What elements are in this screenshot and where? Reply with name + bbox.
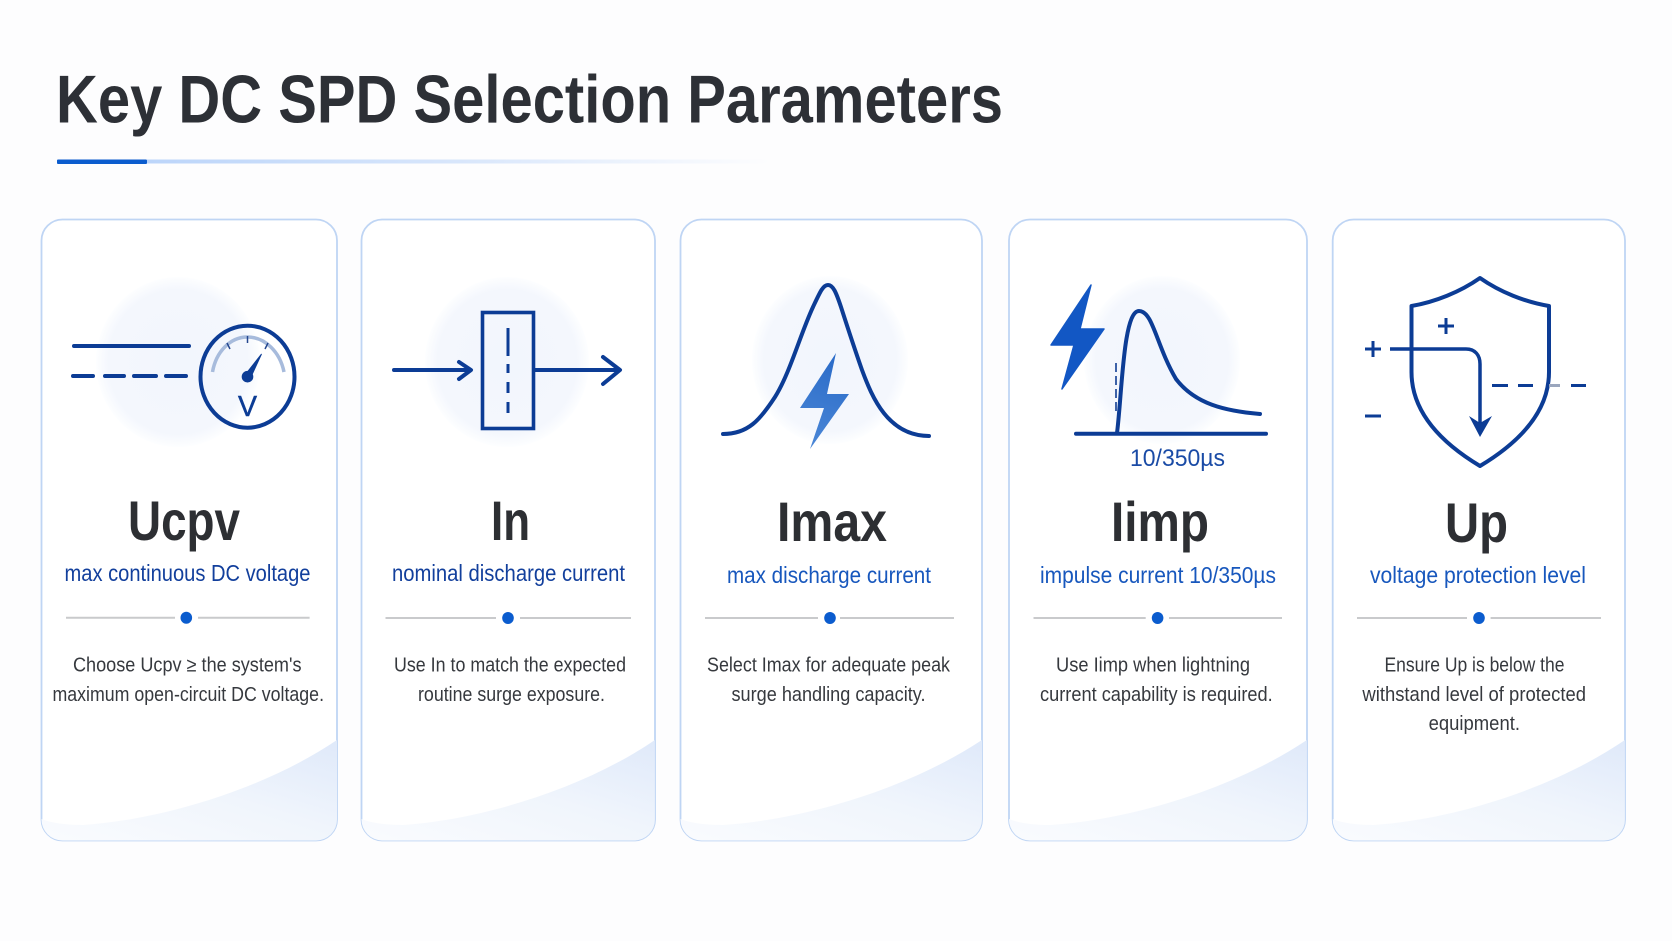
panel: Ucpv	[42, 220, 337, 841]
title underline	[57, 160, 770, 164]
description: Ensure Up is below the	[1384, 655, 1564, 677]
parameter name: Up	[1445, 491, 1508, 554]
description: surge handling capacity.	[732, 684, 926, 706]
card corner wave	[1009, 740, 1307, 841]
divider	[1357, 612, 1601, 624]
description	[52, 655, 324, 706]
description: Select Imax for adequate peak	[707, 655, 951, 677]
description	[1361, 655, 1586, 735]
card corner wave	[1333, 740, 1625, 841]
card corner wave	[42, 740, 337, 841]
panel: Up	[1333, 220, 1625, 841]
panel: In	[362, 220, 655, 841]
title: Key DC SPD Selection Parameters	[56, 62, 1003, 138]
description: Use Iimp when lightning	[1056, 655, 1250, 677]
description	[1040, 655, 1273, 706]
parameter name: Ucpv	[128, 489, 240, 552]
description: Choose Ucpv ≥ the system's	[73, 655, 302, 677]
parameter name: Imax	[777, 490, 887, 553]
divider	[386, 612, 631, 624]
icon: DC lines and voltmeter: V	[238, 391, 258, 423]
divider	[1034, 612, 1282, 624]
divider	[66, 612, 310, 624]
icon: SPD block with current arrows	[394, 277, 620, 447]
description: equipment.	[1429, 713, 1520, 735]
panel: Iimp	[1009, 220, 1307, 841]
icon: 10/350 microsecond impulse waveform	[1051, 276, 1266, 472]
card corner wave	[362, 740, 655, 841]
description: current capability is required.	[1040, 684, 1273, 706]
description: withstand level of protected	[1361, 684, 1586, 706]
parameter name: Iimp	[1111, 490, 1209, 553]
parameter subtitle: nominal discharge current	[392, 560, 626, 586]
description: maximum open-circuit DC voltage.	[52, 684, 324, 706]
description: routine surge exposure.	[418, 684, 605, 706]
icon: DC lines and voltmeter	[73, 277, 294, 447]
description	[394, 655, 626, 706]
card corner wave	[680, 740, 982, 841]
parameter subtitle: impulse current 10/350µs	[1040, 562, 1276, 588]
description	[707, 655, 951, 706]
description: Use In to match the expected	[394, 655, 626, 677]
icon: surge peak with lightning bolt	[723, 276, 929, 449]
panel: Imax	[680, 220, 982, 841]
parameter subtitle: voltage protection level	[1370, 562, 1586, 588]
parameter subtitle: max continuous DC voltage	[64, 560, 310, 586]
icon: 10/350 microsecond impulse waveform: 10/350µs	[1130, 445, 1225, 472]
icon: shield with clamped surge arrow	[1365, 278, 1586, 466]
parameter subtitle: max discharge current	[727, 562, 932, 588]
parameter name: In	[491, 489, 530, 552]
divider	[705, 612, 954, 624]
